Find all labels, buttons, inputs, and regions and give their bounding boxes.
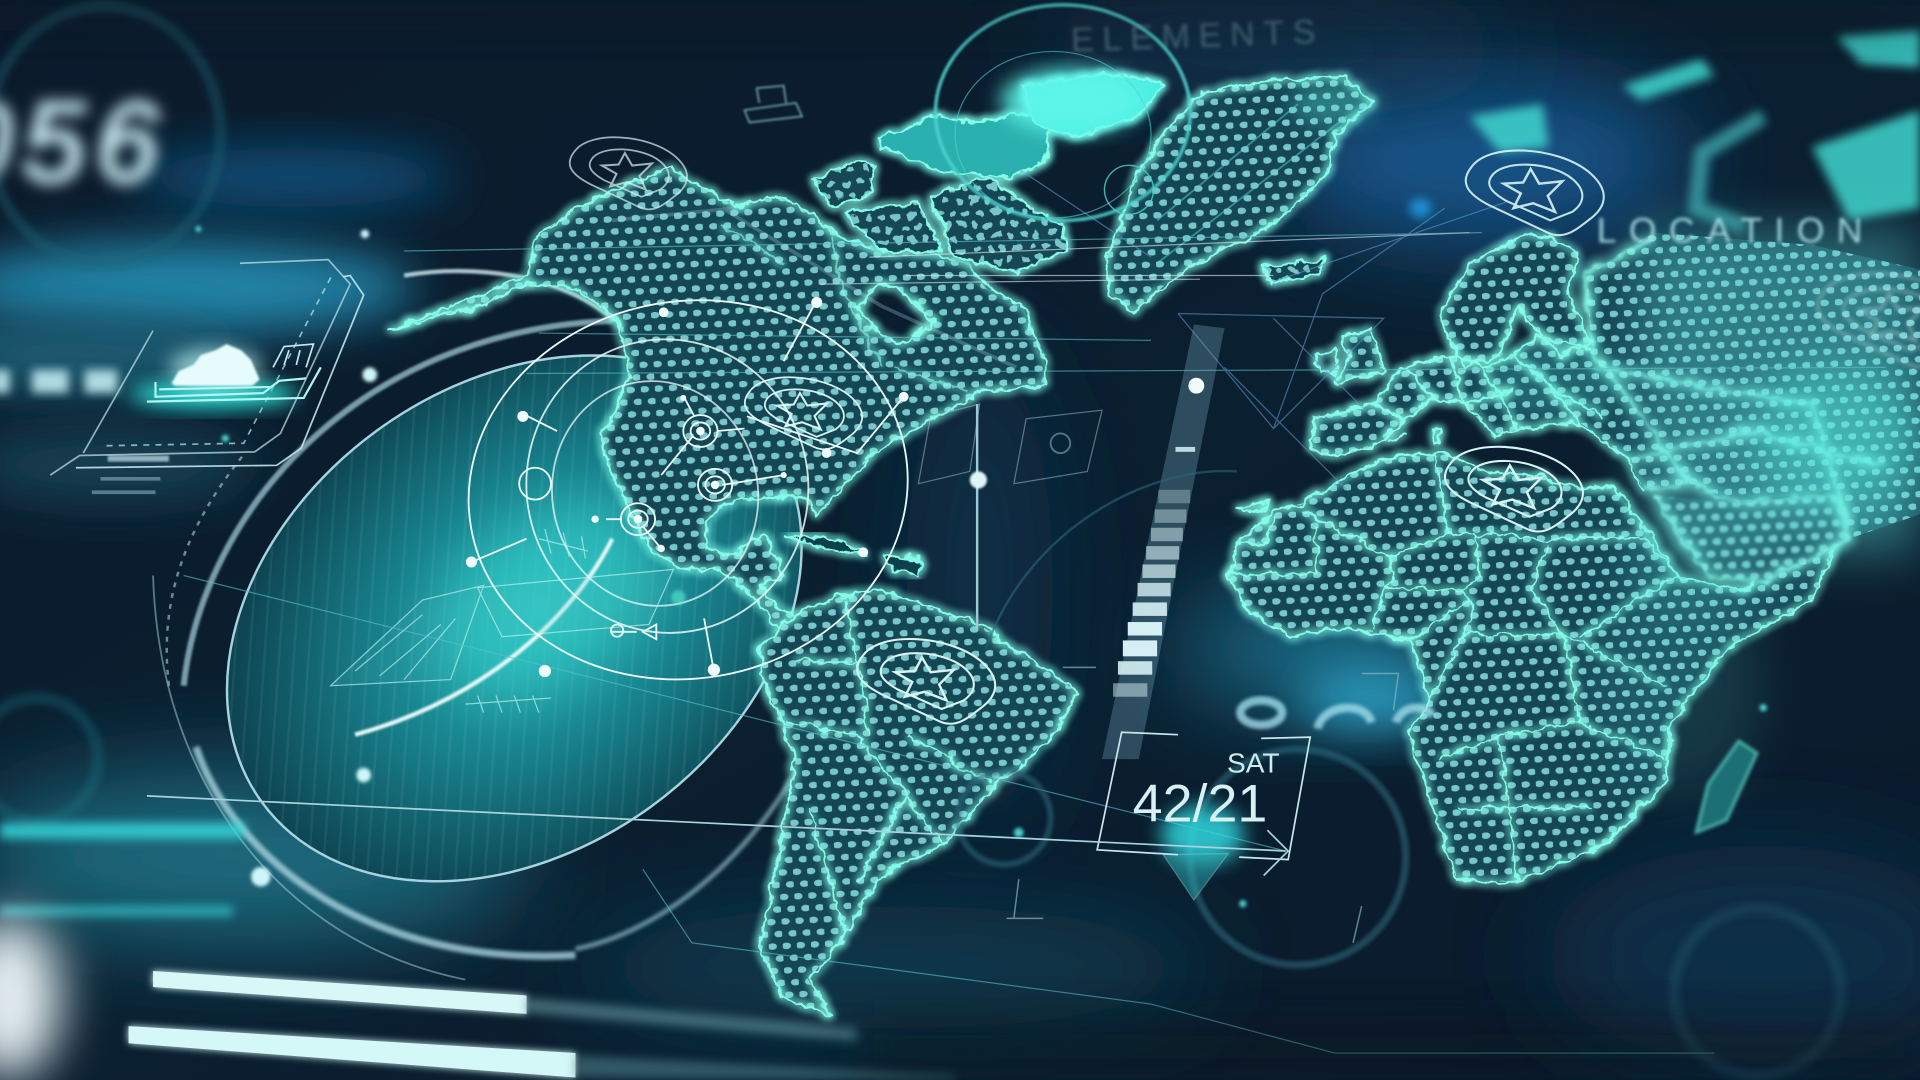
left horizontal streak [0,823,245,916]
dark gauge rings [958,471,1840,1075]
cloud icon [131,344,321,408]
faint ring lower left [0,698,98,820]
greenland [1106,77,1378,312]
north america continent [389,168,1046,637]
radar disc [125,247,904,990]
caribbean islands [784,536,921,576]
icon: badge scandinavia [1466,150,1604,235]
corner brackets [1007,667,1398,943]
blurred label elements: ELEMENTS [1070,13,1325,59]
icon: badge north america [570,137,687,209]
bright glow points [195,226,1767,907]
icon: badge africa [1445,447,1583,532]
thin network lines [184,159,1886,1053]
blurred data blocks left [0,370,118,393]
blurred far-right land [1469,31,1920,227]
icon: badge usa [745,377,862,449]
bottom bright bars [129,971,955,1080]
africa continent [1229,454,1837,882]
icon: badge brazil [857,639,995,724]
radar wedge grid [331,529,673,713]
bottom-left white flare [0,917,61,1079]
top-centre glow patch [1000,69,1142,132]
europe and asia continent [1310,227,1920,612]
date panel [147,732,1310,900]
panel: left cloud HUD [50,260,364,492]
progress ticks [1113,490,1190,697]
top ring [936,5,1190,220]
icon: vehicle [744,86,802,122]
blurred label location: LOCATION [1597,210,1862,250]
madagascar [1696,741,1757,833]
arctic islands [814,73,1324,512]
faint ring top left [0,6,220,263]
icon: badge far right [1818,273,1920,367]
day label: SAT [1227,748,1280,779]
south america continent [759,590,1078,1016]
central axis marker [918,404,1102,631]
date value: 42/21 [1133,775,1267,834]
central vertical slider [1102,324,1224,759]
blurred readout rings [1240,700,1433,729]
radar outer rings [125,247,904,990]
radar nodes [466,297,909,677]
radar target circles [438,266,938,714]
